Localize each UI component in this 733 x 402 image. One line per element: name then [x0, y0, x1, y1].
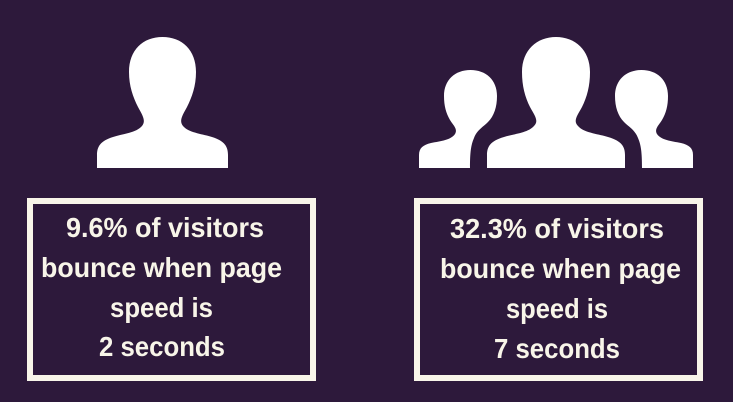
panel: 2 second bounce rate: speed is — [110, 292, 213, 323]
panel: 2 second bounce rate: 2 seconds — [99, 331, 225, 362]
panel: 7 second bounce rate: 7 seconds — [494, 333, 620, 364]
panel: 7 second bounce rate: bounce when page — [440, 253, 681, 284]
panel: 2 second bounce rate: 9.6% of visitors — [66, 212, 264, 243]
icon: single person — [97, 37, 228, 168]
panel: 7 second bounce rate — [417, 201, 700, 378]
panel: 2 second bounce rate — [30, 201, 313, 378]
panel: 7 second bounce rate: speed is — [506, 293, 608, 324]
panel: 2 second bounce rate: bounce when page — [41, 252, 282, 283]
icon: group of three people — [419, 37, 693, 168]
panel: 7 second bounce rate: 32.3% of visitors — [450, 213, 664, 244]
